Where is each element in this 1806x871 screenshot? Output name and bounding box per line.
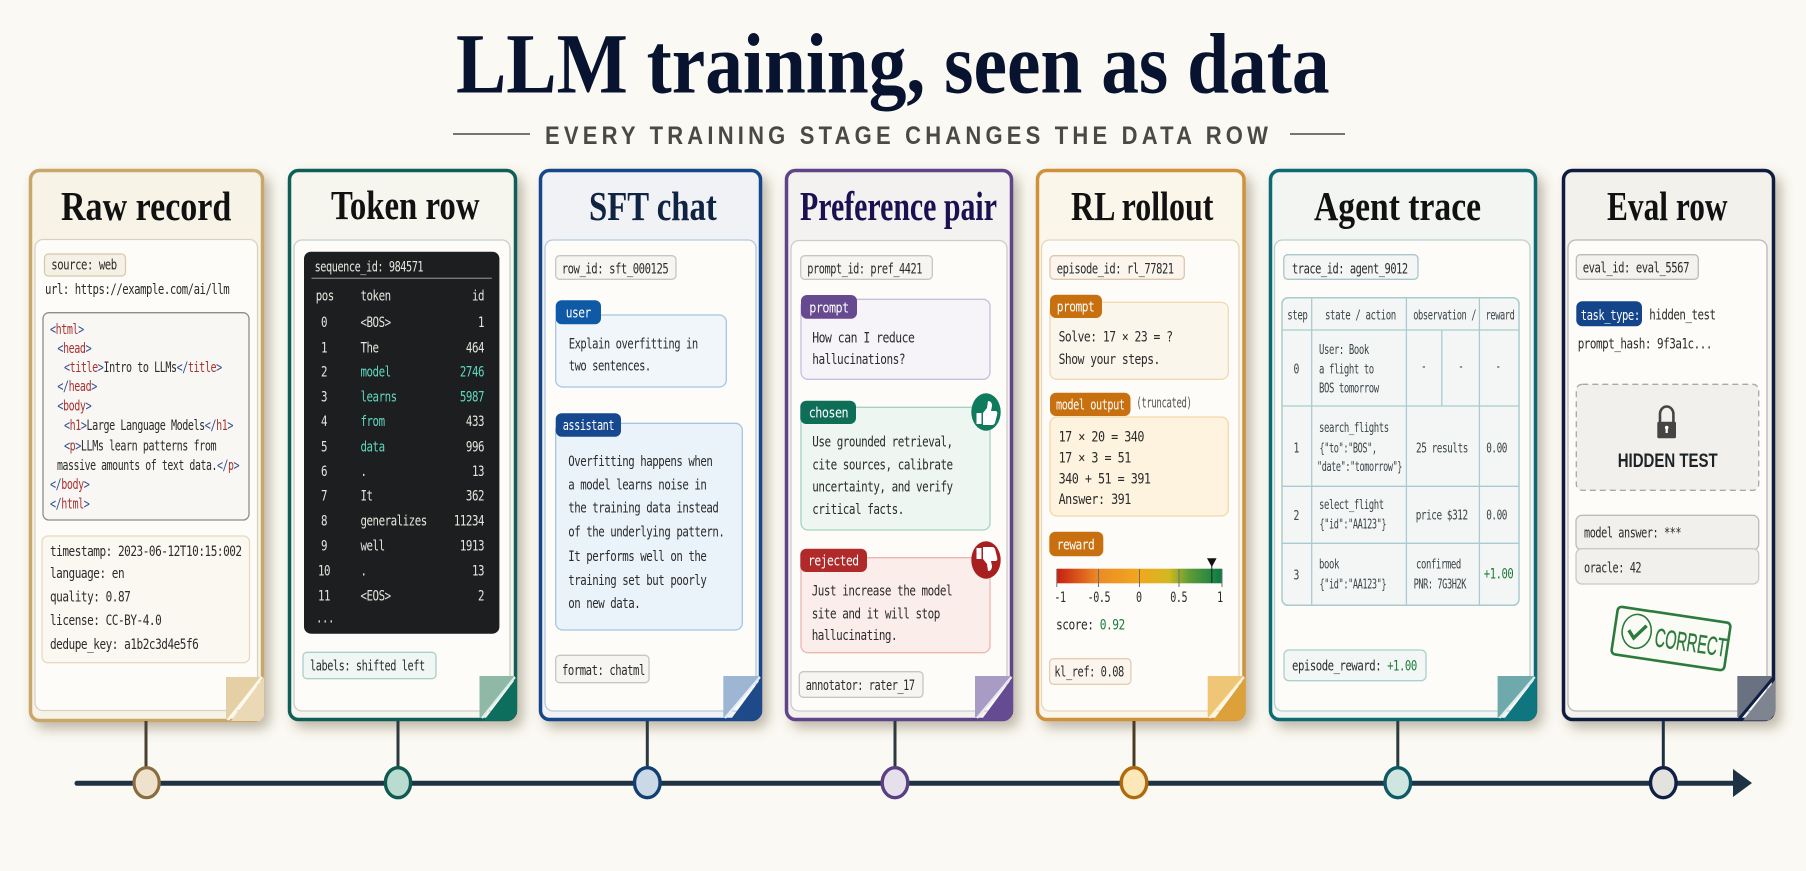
- model output box: [1050, 393, 1228, 516]
- token table: .: [360, 562, 367, 579]
- chip: episode id: episode_id: rl_77821: [1057, 261, 1174, 277]
- token table: 11234: [454, 512, 484, 529]
- reward scale: score: 0.92: [1056, 616, 1125, 633]
- token table: 10: [318, 562, 330, 579]
- icon: page fold: [226, 677, 264, 721]
- token table: .: [360, 463, 367, 479]
- assistant message: training set but poorly: [568, 572, 707, 588]
- html code box: <p>LLMs learn patterns from: [64, 438, 216, 454]
- heading: raw record: Raw record: [61, 184, 231, 230]
- token table: [304, 252, 499, 634]
- chip: annotator: annotator: rater_17: [806, 677, 915, 693]
- chip: eval id: eval_id: eval_5567: [1583, 259, 1689, 276]
- chip: kl ref: kl_ref: 0.08: [1054, 664, 1124, 680]
- assistant message: assistant: [563, 417, 614, 433]
- reward scale: -0.5: [1088, 589, 1110, 605]
- heading: preference pair: Preference pair: [800, 183, 997, 229]
- chosen box: uncertainty, and verify: [812, 478, 954, 495]
- panel: token row: [290, 170, 517, 720]
- trace table: -: [1458, 359, 1463, 374]
- token table: ...: [316, 609, 334, 626]
- heading: eval row: Eval row: [1607, 183, 1728, 229]
- token table: <EOS>: [360, 587, 391, 604]
- reward scale: reward: [1057, 536, 1094, 553]
- reward scale: [1049, 532, 1223, 633]
- trace table: reward: [1486, 308, 1514, 323]
- chip: prompt id: prompt_id: pref_4421: [807, 261, 922, 277]
- token table: <BOS>: [360, 314, 391, 330]
- stamp: correct: CORRECT: [1653, 624, 1728, 663]
- panel: rl rollout: [1038, 170, 1246, 720]
- html code box: <h1>Large Language Models</h1>: [64, 417, 233, 433]
- connector and node 5: [1121, 721, 1147, 798]
- chip: episode id: [1050, 256, 1184, 279]
- token table: id: [472, 287, 484, 304]
- rejected box: site and it will stop: [812, 605, 940, 622]
- token table: model: [360, 363, 391, 380]
- model output box: model output: [1056, 397, 1125, 413]
- assistant message: It performs well on the: [568, 548, 706, 564]
- chip: source: source: web: [51, 256, 117, 273]
- panel: raw record: [30, 170, 264, 721]
- trace table: price $312: [1416, 507, 1468, 523]
- metadata box: license: CC-BY-4.0: [50, 612, 161, 628]
- model answer and oracle: [1576, 515, 1759, 584]
- trace table: observation /: [1413, 308, 1476, 323]
- trace table: select_flight: [1319, 497, 1384, 512]
- token table: learns: [360, 388, 397, 405]
- token table: 433: [466, 413, 484, 429]
- trace table: BOS tomorrow: [1319, 381, 1379, 396]
- model answer and oracle: model answer: ***: [1584, 525, 1681, 541]
- chip: prompt id: [801, 256, 932, 279]
- icon: page fold: [723, 676, 762, 720]
- reward scale: 0: [1136, 589, 1142, 605]
- reward scale: 0.5: [1170, 589, 1187, 605]
- panel: preference pair: [786, 170, 1013, 720]
- icon: page fold: [1498, 676, 1536, 720]
- metadata box: [42, 536, 250, 663]
- timeline arrow: [77, 769, 1752, 797]
- token table: 1913: [460, 537, 484, 554]
- chip: eval id: [1576, 255, 1698, 279]
- heading: token row: Token row: [331, 184, 480, 229]
- title: LLM training, seen as data: [456, 17, 1330, 112]
- model output box: 340 + 51 = 391: [1059, 471, 1150, 488]
- trace table: search_flights: [1319, 420, 1389, 435]
- model output box: 17 × 20 = 340: [1059, 430, 1144, 446]
- model output box: 17 × 3 = 51: [1059, 450, 1131, 467]
- trace table: 2: [1293, 508, 1299, 523]
- subtitle: EVERY TRAINING STAGE CHANGES THE DATA ROW: [545, 122, 1272, 149]
- token table: 9: [321, 537, 327, 554]
- token table: 362: [466, 487, 484, 504]
- chosen box: critical facts.: [812, 501, 904, 517]
- token table: 13: [472, 463, 484, 479]
- rejected box: rejected: [808, 553, 859, 570]
- heading: sft chat: SFT chat: [589, 185, 717, 230]
- chip: annotator: [799, 672, 923, 697]
- trace table: confirmed: [1416, 557, 1461, 572]
- chip: labels: [303, 652, 436, 679]
- token table: generalizes: [360, 512, 427, 529]
- assistant message: [556, 413, 742, 630]
- trace table: 0.00: [1486, 440, 1508, 456]
- token table: 4: [321, 413, 327, 429]
- user message: two sentences.: [569, 358, 651, 374]
- chosen box: chosen: [809, 405, 848, 422]
- icon: thumbs up: [971, 393, 1001, 431]
- token table: pos: [316, 287, 334, 304]
- chip: episode reward: episode_reward: +1.00: [1292, 657, 1417, 674]
- token table: 1: [478, 314, 484, 330]
- trace table: 0: [1293, 361, 1299, 377]
- token table: token: [360, 287, 391, 304]
- token table: The: [360, 339, 379, 356]
- connector and node 6: [1385, 721, 1411, 798]
- chip: episode reward: [1284, 650, 1426, 681]
- token table: 2: [321, 363, 327, 380]
- trace table: step: [1287, 308, 1308, 323]
- token table: 11: [318, 587, 330, 604]
- token table: from: [360, 413, 385, 429]
- reward scale: 1: [1217, 589, 1223, 605]
- assistant message: of the underlying pattern.: [568, 523, 724, 540]
- trace table: User: Book: [1319, 342, 1369, 357]
- token table: sequence_id: 984571: [315, 259, 423, 275]
- html code box: </html>: [50, 496, 90, 512]
- hidden test box: [1576, 384, 1759, 490]
- task type: hidden_test: [1649, 306, 1716, 323]
- stamp: correct: [1611, 606, 1731, 671]
- model output box: Answer: 391: [1059, 492, 1131, 508]
- token table: data: [360, 438, 385, 455]
- trace table: book: [1319, 557, 1340, 572]
- token table: 5987: [460, 388, 484, 405]
- chip: kl ref: [1050, 659, 1131, 684]
- prompt box: prompt: [1057, 298, 1094, 315]
- trace table: 1: [1293, 440, 1299, 456]
- panel: sft chat: [540, 170, 762, 720]
- trace table: a flight to: [1319, 362, 1374, 377]
- assistant message: the training data instead: [568, 499, 718, 516]
- chip: source: [44, 254, 126, 276]
- html code box: [43, 313, 249, 520]
- metadata box: quality: 0.87: [50, 588, 130, 605]
- prompt box: [801, 295, 990, 379]
- chip: row id: row_id: sft_000125: [562, 260, 668, 277]
- html code box: <html>: [50, 321, 84, 337]
- chip: trace id: [1284, 255, 1418, 279]
- chip: trace id: trace_id: agent_9012: [1292, 261, 1408, 277]
- connector and node 7: [1650, 721, 1676, 798]
- chip: row id: [556, 256, 676, 279]
- html code box: massive amounts of text data.</p>: [57, 457, 239, 473]
- prompt box: prompt: [809, 300, 849, 317]
- token table: 5: [321, 438, 327, 455]
- heading: agent trace: Agent trace: [1314, 185, 1481, 230]
- assistant message: Overfitting happens when: [568, 453, 712, 469]
- trace table: {"id":"AA123"}: [1320, 516, 1386, 532]
- icon: thumbs down: [971, 541, 1001, 579]
- token table: 7: [321, 487, 327, 504]
- prompt box: Show your steps.: [1059, 352, 1160, 368]
- connector and node 2: [385, 721, 411, 798]
- icon: lock: [1657, 406, 1676, 438]
- prompt box: How can I reduce: [812, 330, 914, 347]
- rejected box: Just increase the model: [812, 582, 952, 599]
- trace table: -: [1421, 359, 1426, 374]
- assistant message: on new data.: [568, 595, 640, 611]
- user message: user: [566, 304, 592, 321]
- prompt box: Solve: 17 × 23 = ?: [1059, 330, 1173, 346]
- trace table: {"to":"BOS",: [1320, 441, 1377, 456]
- trace table: 0.00: [1486, 507, 1508, 523]
- trace table: +1.00: [1484, 565, 1513, 582]
- token table: 996: [466, 438, 484, 455]
- icon: page fold: [1208, 676, 1246, 720]
- token table: 2: [478, 587, 484, 604]
- user message: Explain overfitting in: [569, 336, 698, 352]
- rejected box: hallucinating.: [812, 627, 897, 643]
- html code box: </head>: [57, 378, 97, 394]
- panel: eval row: [1564, 170, 1775, 720]
- model answer and oracle: oracle: 42: [1584, 560, 1641, 576]
- connector and node 3: [634, 721, 660, 798]
- token table: 3: [321, 388, 327, 405]
- panel: agent trace: [1270, 170, 1536, 720]
- token table: 2746: [460, 363, 484, 380]
- rejected box: [800, 549, 990, 653]
- trace table: {"id":"AA123"}: [1320, 576, 1386, 592]
- token table: 13: [472, 562, 484, 579]
- token table: 0: [321, 314, 327, 330]
- html code box: </body>: [50, 476, 90, 492]
- trace table: "date":"tomorrow"}: [1317, 459, 1402, 475]
- html code box: <body>: [57, 398, 91, 414]
- model output box: (truncated): [1136, 394, 1192, 411]
- trace table: -: [1495, 359, 1501, 374]
- token table: well: [360, 537, 385, 554]
- chip: labels: labels: shifted left: [310, 658, 425, 674]
- chosen box: Use grounded retrieval,: [812, 433, 953, 450]
- html code box: <head>: [57, 340, 91, 356]
- chip: format: [556, 655, 649, 683]
- trace table: 3: [1293, 567, 1299, 583]
- chip: format: format: chatml: [562, 661, 645, 678]
- prompt box: [1050, 295, 1228, 379]
- connector and node 1: [134, 721, 159, 798]
- trace table: [1282, 298, 1519, 605]
- user message: [556, 300, 726, 387]
- metadata box: dedupe_key: a1b2c3d4e5f6: [50, 636, 198, 652]
- prompt box: hallucinations?: [812, 351, 905, 367]
- token table: It: [360, 487, 373, 504]
- hidden test box: HIDDEN TEST: [1618, 450, 1718, 471]
- assistant message: a model learns noise in: [568, 476, 706, 493]
- token table: 8: [321, 512, 327, 529]
- reward scale: -1: [1054, 589, 1066, 605]
- token table: 464: [466, 339, 484, 356]
- token table: 1: [321, 339, 327, 356]
- trace table: PNR: 7G3H2K: [1414, 576, 1467, 592]
- prompt hash: prompt_hash: 9f3a1c...: [1578, 335, 1712, 352]
- chosen box: cite sources, calibrate: [812, 456, 953, 473]
- url text: url: https://example.com/ai/llm: [45, 280, 229, 297]
- heading: rl rollout: RL rollout: [1071, 183, 1214, 229]
- token table: 6: [321, 463, 327, 479]
- metadata box: language: en: [50, 565, 124, 581]
- chosen box: [800, 401, 990, 530]
- icon: page fold: [480, 676, 517, 720]
- connector and node 4: [882, 721, 908, 798]
- trace table: 25 results: [1416, 440, 1468, 456]
- icon: page fold: [975, 676, 1013, 720]
- html code box: <title>Intro to LLMs</title>: [64, 359, 222, 375]
- trace table: state / action: [1325, 308, 1396, 323]
- icon: page fold: [1737, 676, 1775, 720]
- metadata box: timestamp: 2023-06-12T10:15:002: [50, 543, 242, 559]
- task type: task_type:: [1581, 306, 1640, 323]
- task type: [1576, 301, 1716, 326]
